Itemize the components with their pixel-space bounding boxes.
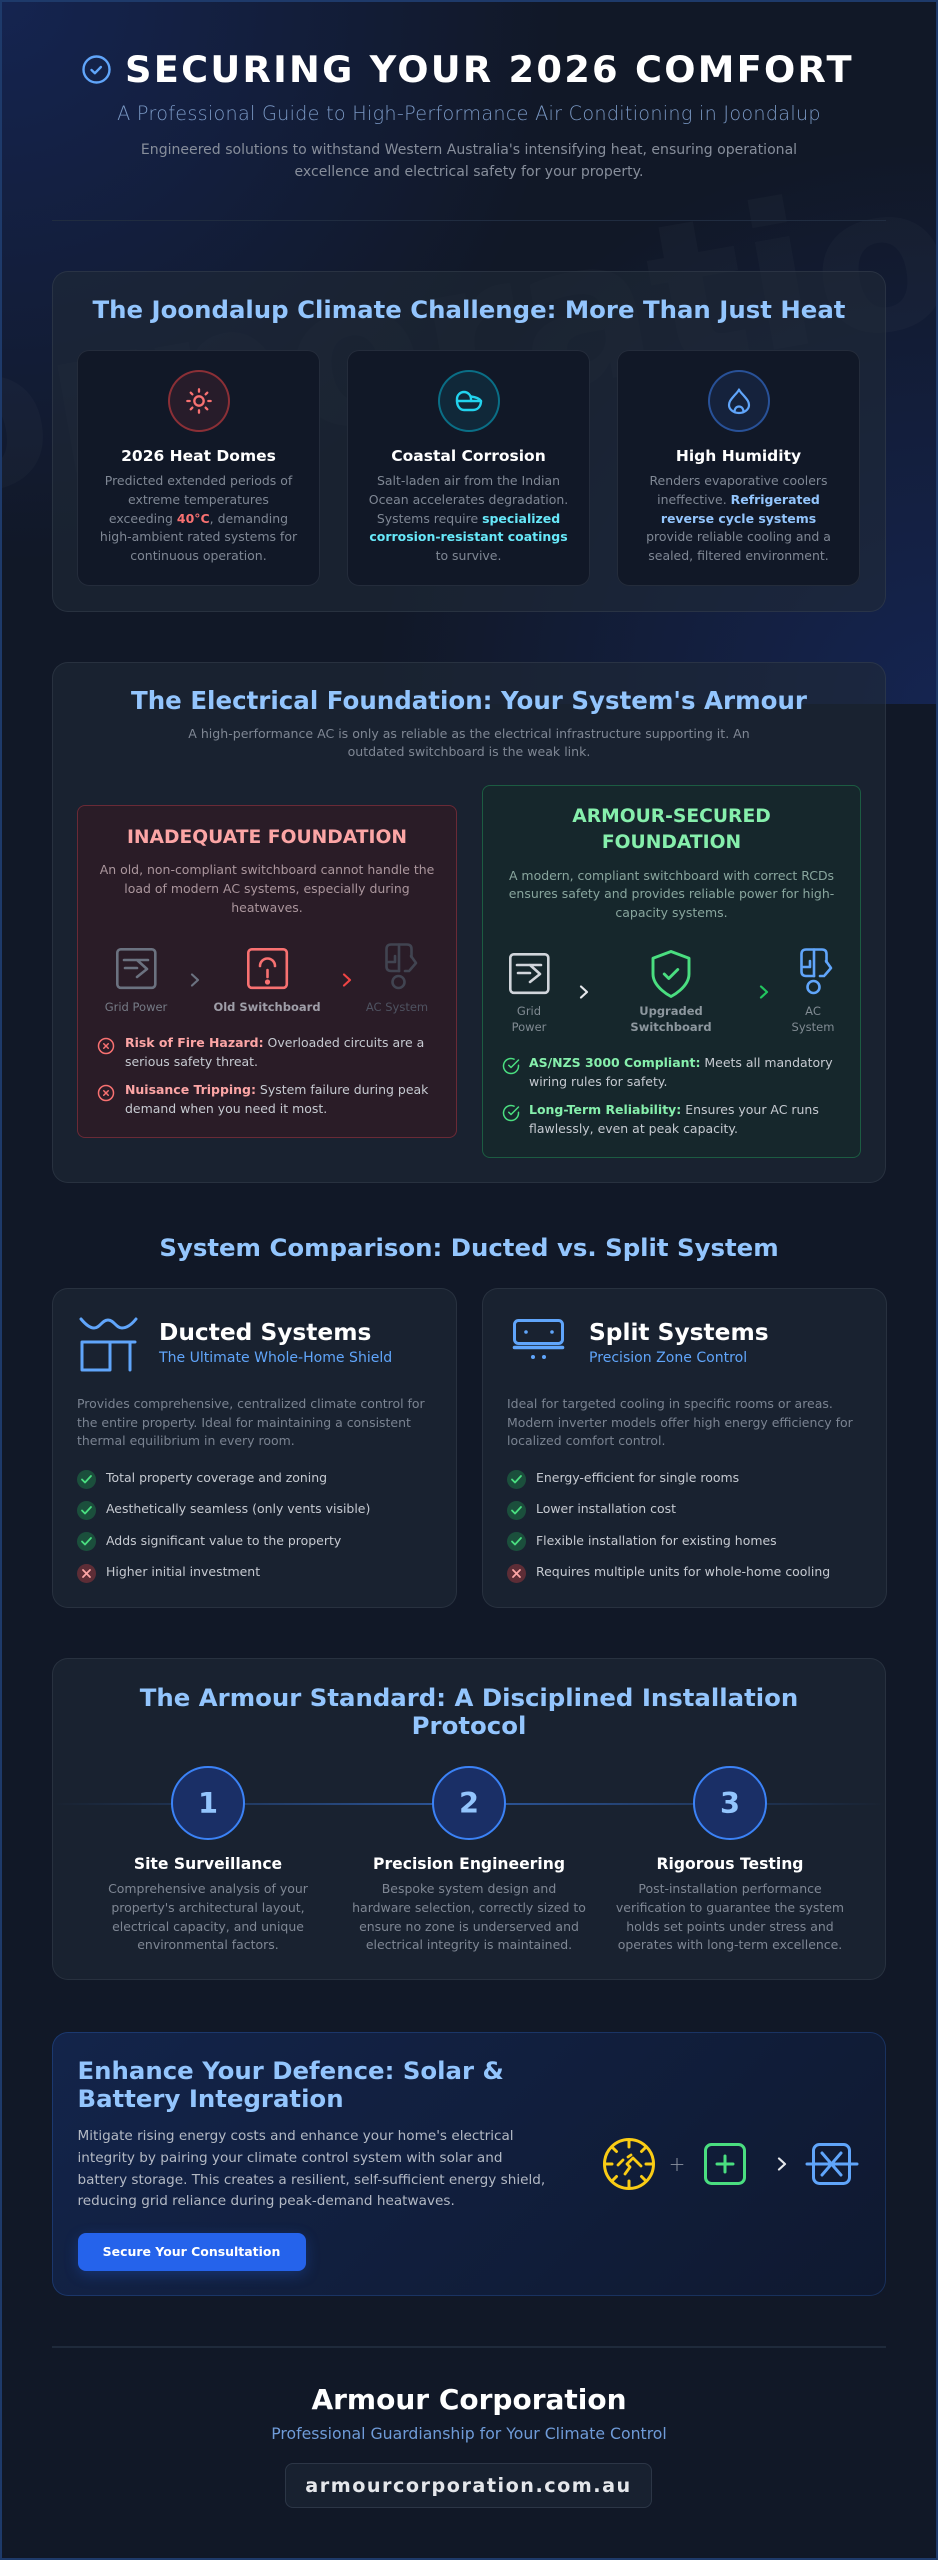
step 1 text: environmental factors. — [137, 1937, 279, 1952]
card text: sealed, filtered environment. — [648, 548, 829, 563]
card title: 2026 Heat Domes — [121, 447, 276, 465]
step 3 number — [693, 1766, 767, 1840]
step 1 number — [171, 1766, 245, 1840]
split description — [507, 1396, 853, 1448]
card text — [100, 473, 298, 563]
card: coastal corrosion — [347, 350, 590, 586]
step 3 number: 3 — [720, 1786, 740, 1820]
intro text: excellence and electrical safety for your property. — [295, 164, 643, 180]
split description: localized comfort control. — [507, 1433, 665, 1448]
tagline: Professional Guardianship for Your Climate Control — [271, 2424, 667, 2443]
drawback icon — [77, 1564, 96, 1582]
heading: solar: Battery Integration — [78, 2084, 344, 2113]
card text: extreme temperatures — [128, 492, 269, 507]
footer — [0, 2370, 938, 2520]
button — [78, 2233, 306, 2271]
website box — [285, 2463, 652, 2508]
icon: shield check — [652, 950, 690, 998]
step 3 title: Rigorous Testing — [657, 1855, 803, 1873]
risk item — [125, 1035, 424, 1069]
card text: to survive. — [436, 548, 501, 563]
split title: Split Systems — [589, 1319, 769, 1346]
intro text: Engineered solutions to withstand Western Australia's intensifying heat, ensuring operational — [141, 142, 797, 158]
arrow — [580, 985, 588, 999]
green card title: ARMOUR-SECURED — [572, 806, 771, 827]
section intro — [188, 726, 750, 759]
icon: shield check circle — [82, 55, 111, 84]
card text: Renders evaporative coolers — [649, 473, 828, 488]
icon: old switchboard alert — [247, 948, 288, 990]
ducted description: the entire property. Ideal for maintaining a consistent — [77, 1415, 411, 1430]
icon: x circle — [98, 1038, 114, 1054]
icon: grid power — [509, 953, 550, 994]
heading: electrical foundation: The Electrical Foundation: Your System's Armour — [131, 686, 807, 715]
icon: ducted — [79, 1317, 138, 1372]
step 1 text: property's architectural layout, — [111, 1900, 305, 1915]
red card text: An old, non-compliant switchboard cannot handle the — [100, 862, 434, 877]
step 1 text: electrical capacity, and unique — [112, 1919, 304, 1934]
step 2 number — [432, 1766, 506, 1840]
solar text: battery storage. This creates a resilient, self-sufficient energy shield, — [78, 2172, 545, 2188]
flow labels: Grid Power — [105, 1000, 167, 1014]
risk item: Nuisance Tripping: System failure during peak — [125, 1082, 428, 1097]
card text: ineffective. Refrigerated — [657, 492, 820, 507]
button: Secure Your Consultation — [103, 2244, 280, 2259]
card text: corrosion-resistant coatings — [369, 529, 568, 544]
red card title: INADEQUATE FOUNDATION — [127, 827, 407, 848]
card: inadequate foundation — [77, 805, 457, 1138]
heading: system comparison: System Comparison: Ducted vs. Split System — [159, 1233, 779, 1262]
step 3 text: verification to guarantee the system — [616, 1900, 844, 1915]
step 2 text: ensure no zone is underserved and — [359, 1919, 579, 1934]
flow label: Old Switchboard — [213, 1000, 321, 1014]
icon: grid power — [116, 948, 157, 990]
benefit item: AS/NZS 3000 Compliant: Meets all mandatory — [529, 1055, 833, 1070]
card: armour-secured foundation — [482, 785, 861, 1158]
flow label: System — [792, 1020, 834, 1034]
flow label — [512, 1004, 546, 1034]
icon: split unit — [512, 1319, 564, 1359]
risk item: serious safety threat. — [125, 1054, 258, 1069]
card text: high-ambient rated systems for — [100, 529, 297, 544]
feature text: Aesthetically seamless (only vents visible) — [106, 1501, 370, 1516]
header — [82, 48, 854, 180]
risk item: Risk of Fire Hazard: Overloaded circuits are a — [125, 1035, 424, 1050]
ducted title: Ducted Systems — [159, 1319, 371, 1346]
section intro: outdated switchboard is the weak link. — [348, 744, 590, 759]
feature text: Total property coverage and zoning — [106, 1470, 327, 1485]
step 3 text: holds set points under stress and — [626, 1919, 834, 1934]
risk item: demand when you need it most. — [125, 1101, 327, 1116]
panel: armour standard — [52, 1658, 886, 1980]
risk item — [125, 1082, 428, 1116]
solar text: integrity by pairing your climate control system with solar and — [78, 2150, 502, 2166]
panel: climate challenge — [52, 271, 886, 612]
feature text: Adds significant value to the property — [106, 1533, 341, 1548]
feature icon — [507, 1532, 526, 1551]
flow label: AC — [805, 1004, 821, 1018]
card text: provide reliable cooling and a — [646, 529, 831, 544]
flow label: Grid — [517, 1004, 541, 1018]
company name: Armour Corporation — [311, 2383, 627, 2416]
feature icon — [77, 1470, 96, 1488]
feature text: Flexible installation for existing homes — [536, 1533, 777, 1548]
step 1 text — [108, 1881, 308, 1952]
benefit item — [529, 1055, 833, 1089]
panel: electrical foundation — [52, 662, 886, 1183]
drawback icon — [507, 1564, 526, 1582]
icon: AC system — [800, 948, 832, 994]
step 3 text: Post-installation performance — [638, 1881, 822, 1896]
heading: armour standard — [140, 1683, 798, 1740]
feature icon — [507, 1501, 526, 1520]
icon: x circle — [98, 1084, 114, 1102]
card text: Salt-laden air from the Indian — [377, 473, 560, 488]
step 1 text: Comprehensive analysis of your — [108, 1881, 308, 1896]
step 1 title: Site Surveillance — [134, 1855, 282, 1873]
card: heat domes — [77, 350, 320, 586]
flow label: Power — [512, 1020, 546, 1034]
icon: AC system faded — [385, 943, 418, 990]
flow label: Switchboard — [630, 1020, 712, 1034]
red card text — [100, 862, 434, 915]
icon: check circle — [502, 1104, 520, 1122]
ducted description — [77, 1396, 425, 1448]
card text: reverse cycle systems — [661, 511, 816, 526]
header divider — [52, 220, 886, 221]
step 3 text: operates with long-term excellence. — [618, 1937, 842, 1952]
arrow — [760, 985, 768, 999]
card text: Systems require specialized — [377, 511, 560, 526]
arrow — [190, 973, 200, 987]
split subtitle: Precision Zone Control — [589, 1350, 747, 1366]
feature text: Lower installation cost — [536, 1501, 676, 1516]
flow label — [630, 1004, 712, 1034]
website box: armourcorporation.com.au — [305, 2474, 632, 2497]
subtitle: A Professional Guide to High-Performance Air Conditioning in Joondalup — [117, 102, 821, 125]
card text: Ocean accelerates degradation. — [369, 492, 568, 507]
arrow — [777, 2157, 787, 2171]
solar text: Mitigate rising energy costs and enhance your home's electrical — [78, 2128, 514, 2144]
green card title: FOUNDATION — [602, 832, 741, 852]
icon: droplet — [708, 370, 770, 432]
flow label: AC System — [366, 1000, 428, 1014]
step 2 title: Precision Engineering — [373, 1855, 565, 1873]
icon: battery — [704, 2143, 746, 2185]
icon: salt bowl — [438, 370, 500, 432]
step 3 text — [616, 1881, 844, 1952]
card: high humidity — [617, 350, 860, 586]
step 1 number: 1 — [198, 1786, 218, 1820]
feature text: Energy-efficient for single rooms — [536, 1470, 739, 1485]
plus sign: + — [669, 2152, 685, 2176]
flow label — [792, 1004, 834, 1034]
green card text: A modern, compliant switchboard with correct RCDs — [509, 868, 834, 882]
background glow layer — [0, 0, 938, 704]
benefit item: wiring rules for safety. — [529, 1074, 667, 1089]
icon: check circle — [502, 1058, 520, 1074]
timeline line — [52, 1803, 886, 1805]
step 2 number: 2 — [459, 1786, 479, 1820]
red card text: heatwaves. — [231, 900, 303, 915]
step 2 text — [352, 1881, 586, 1952]
card text: continuous operation. — [130, 548, 267, 563]
green card text: ensures safety and provides reliable power for high- — [509, 886, 834, 901]
red card text: load of modern AC systems, especially during — [124, 881, 410, 896]
split description: Ideal for targeted cooling in specific rooms or areas. — [507, 1396, 833, 1411]
feature icon — [507, 1470, 526, 1488]
ducted description: thermal equilibrium in every room. — [77, 1433, 295, 1448]
feature icon — [77, 1532, 96, 1551]
heading: armour standard: Protocol — [412, 1711, 526, 1740]
card title: High Humidity — [676, 447, 801, 465]
heading: armour standard: The Armour Standard: A Disciplined Installation — [140, 1683, 798, 1712]
step 2 text: electrical integrity is maintained. — [366, 1937, 572, 1952]
card text: exceeding 40°C, demanding — [109, 511, 288, 526]
icon: sun — [168, 370, 230, 432]
arrow — [342, 973, 352, 987]
flow label: Upgraded — [639, 1004, 703, 1018]
split description: Modern inverter models offer high energy efficiency for — [507, 1415, 853, 1430]
title: SECURING YOUR 2026 COMFORT — [125, 48, 854, 91]
section intro: A high-performance AC is only as reliable as the electrical infrastructure supporting it. An — [188, 726, 750, 740]
feature icon — [77, 1501, 96, 1520]
drawback text: Higher initial investment — [106, 1564, 260, 1579]
heading: climate challenge: The Joondalup Climate Challenge: More Than Just Heat — [93, 295, 845, 324]
solar text: reducing grid reliance during peak-demand heatwaves. — [78, 2193, 455, 2209]
card text: Predicted extended periods of — [105, 473, 292, 488]
heading: solar: Enhance Your Defence: Solar & — [78, 2056, 504, 2085]
icon: protected AC — [806, 2143, 857, 2185]
benefit item: Long-Term Reliability: Ensures your AC runs — [529, 1102, 819, 1117]
footer divider — [52, 2346, 886, 2348]
step 2 text: Bespoke system design and — [382, 1881, 556, 1896]
panel: ducted systems — [52, 1288, 457, 1608]
panel: split systems — [482, 1288, 887, 1608]
green card text: capacity systems. — [615, 905, 728, 920]
panel: solar and battery — [52, 2032, 886, 2296]
card title: Coastal Corrosion — [391, 447, 546, 465]
solar text — [78, 2126, 545, 2213]
heading: solar — [78, 2056, 504, 2113]
green card title — [572, 806, 771, 852]
green card text — [509, 868, 834, 920]
drawback text: Requires multiple units for whole-home cooling — [536, 1564, 830, 1579]
card text — [369, 473, 568, 563]
intro text — [141, 142, 797, 180]
benefit item: flawlessly, even at peak capacity. — [529, 1121, 738, 1136]
ducted subtitle: The Ultimate Whole-Home Shield — [159, 1350, 392, 1366]
step 2 text: hardware selection, correctly sized to — [352, 1900, 586, 1915]
icon: solar — [603, 2138, 655, 2190]
benefit item — [529, 1102, 819, 1136]
card text — [646, 473, 831, 563]
ducted description: Provides comprehensive, centralized climate control for — [77, 1396, 425, 1411]
